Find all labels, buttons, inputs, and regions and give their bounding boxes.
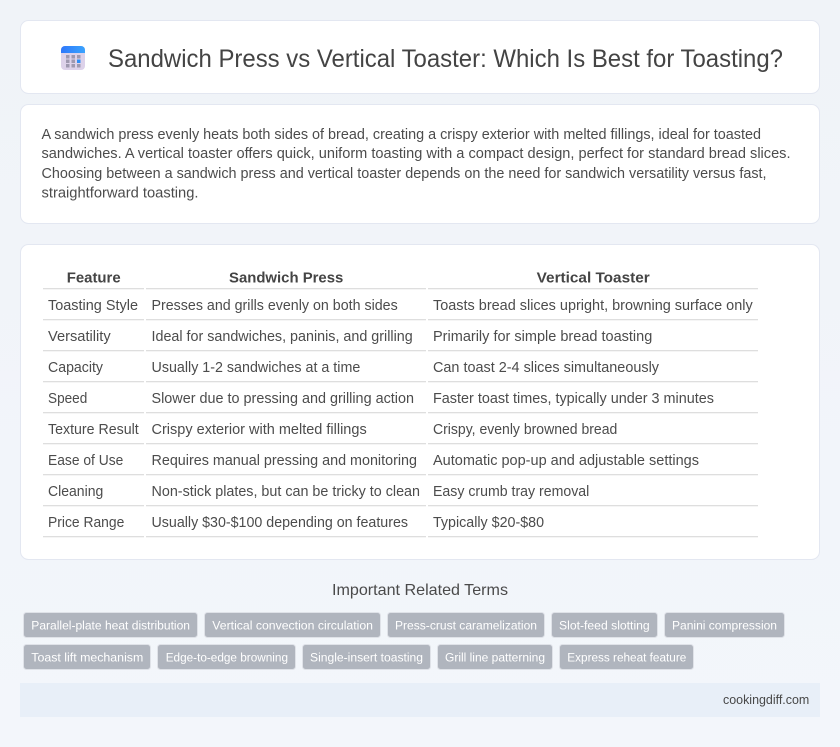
row: cleaning: Non-stick plates, but can be tricky to clean bbox=[152, 484, 420, 500]
row: capacity: Usually 1-2 sandwiches at a time bbox=[152, 360, 360, 376]
intro text: Choosing between a sandwich press and vertical toaster depends on the need for sandwich versatility versus fast, bbox=[42, 166, 766, 182]
row: speed: Faster toast times, typically under 3 minutes bbox=[433, 391, 714, 407]
table header row: Sandwich Press bbox=[229, 270, 343, 286]
row: texture result: Crispy exterior with melted fillings bbox=[152, 422, 367, 438]
row: cleaning: Cleaning bbox=[48, 484, 103, 500]
tag: Panini compression bbox=[672, 618, 777, 632]
tag bbox=[24, 612, 198, 638]
row: price range: Usually $30-$100 depending on features bbox=[152, 515, 408, 531]
intro text: sandwiches. A vertical toaster offers quick, uniform toasting with a compact design, perfect for standard bread slices. bbox=[42, 146, 790, 162]
related terms tags bbox=[24, 612, 784, 670]
tag bbox=[24, 644, 150, 670]
tag: Single-insert toasting bbox=[310, 650, 423, 664]
tag bbox=[552, 612, 658, 638]
row: speed: Slower due to pressing and grilling action bbox=[152, 391, 414, 407]
tag: Press-crust caramelization bbox=[395, 618, 537, 632]
row: versatility: Primarily for simple bread toasting bbox=[433, 329, 652, 345]
table header row: Vertical Toaster bbox=[537, 270, 650, 286]
row: texture result bbox=[48, 422, 617, 438]
row: capacity bbox=[48, 360, 660, 376]
row: toasting style bbox=[48, 298, 753, 314]
row: price range bbox=[48, 515, 544, 531]
footer source: cookingdiff.com bbox=[723, 693, 809, 707]
tag: Toast lift mechanism bbox=[31, 650, 143, 664]
comparison table panel bbox=[20, 244, 820, 560]
tag: Vertical convection circulation bbox=[212, 618, 373, 632]
tag: Express reheat feature bbox=[567, 650, 686, 664]
icon: calendar bbox=[61, 46, 85, 70]
title: Sandwich Press vs Vertical Toaster: Which Is Best for Toasting? bbox=[108, 45, 783, 73]
row: texture result: Texture Result bbox=[48, 422, 139, 438]
tag: Edge-to-edge browning bbox=[166, 650, 288, 664]
row: texture result: Crispy, evenly browned bread bbox=[433, 422, 617, 438]
row: versatility: Ideal for sandwiches, paninis, and grilling bbox=[152, 329, 413, 345]
row: cleaning: Easy crumb tray removal bbox=[433, 484, 589, 500]
row: price range: Price Range bbox=[48, 515, 124, 531]
tag bbox=[302, 644, 430, 670]
tag bbox=[560, 644, 694, 670]
tag bbox=[438, 644, 552, 670]
row: toasting style: Toasts bread slices upright, browning surface only bbox=[433, 298, 753, 314]
tag bbox=[204, 612, 380, 638]
tag: Parallel-plate heat distribution bbox=[31, 618, 190, 632]
intro text bbox=[42, 127, 790, 202]
row: versatility: Versatility bbox=[48, 329, 111, 345]
tag bbox=[158, 644, 296, 670]
table header row: Feature bbox=[67, 270, 121, 286]
related terms heading: Important Related Terms bbox=[332, 582, 508, 599]
row: price range: Typically $20-$80 bbox=[433, 515, 544, 531]
tag bbox=[388, 612, 544, 638]
row: ease of use: Ease of Use bbox=[48, 453, 123, 469]
intro text: A sandwich press evenly heats both sides of bread, creating a crispy exterior with melted fillings, ideal for toasted bbox=[42, 127, 761, 143]
tag: Slot-feed slotting bbox=[559, 618, 650, 632]
row: ease of use bbox=[48, 453, 699, 469]
row: capacity: Can toast 2-4 slices simultaneously bbox=[433, 360, 660, 376]
intro panel bbox=[20, 104, 820, 224]
footer bar bbox=[20, 683, 820, 717]
row: speed bbox=[48, 391, 714, 407]
row: speed: Speed bbox=[48, 391, 87, 407]
header panel bbox=[20, 20, 820, 94]
row: versatility bbox=[48, 329, 652, 345]
row: toasting style: Presses and grills evenly on both sides bbox=[152, 298, 398, 314]
row: ease of use: Automatic pop-up and adjustable settings bbox=[433, 453, 699, 469]
intro text: straightforward toasting. bbox=[42, 186, 198, 202]
tag bbox=[664, 612, 784, 638]
row: capacity: Capacity bbox=[48, 360, 104, 376]
row: ease of use: Requires manual pressing and monitoring bbox=[152, 453, 417, 469]
row: cleaning bbox=[48, 484, 589, 500]
table header row bbox=[67, 270, 650, 286]
tag: Grill line patterning bbox=[445, 650, 545, 664]
table rules bbox=[43, 288, 758, 537]
row: toasting style: Toasting Style bbox=[48, 298, 138, 314]
